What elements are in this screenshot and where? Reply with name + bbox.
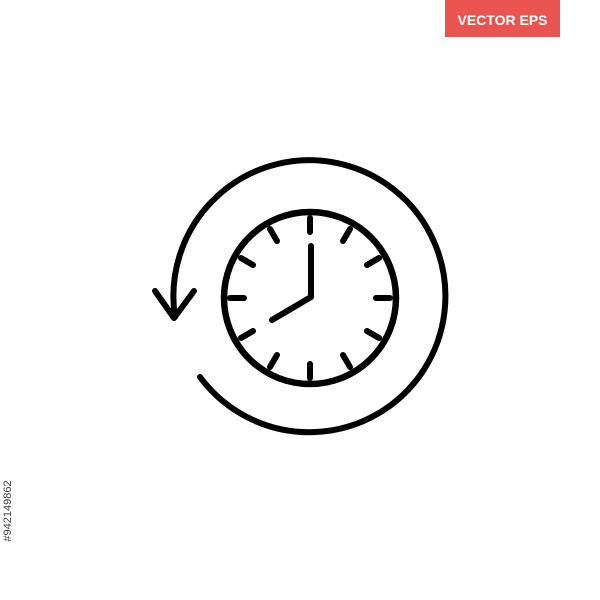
clock hands [272,246,311,320]
badge: vector eps: VECTOR EPS [458,12,548,28]
side id text: #942149862 [2,480,14,542]
badge: vector eps [445,0,560,37]
circular arrow [155,160,445,432]
clock face [224,212,396,384]
